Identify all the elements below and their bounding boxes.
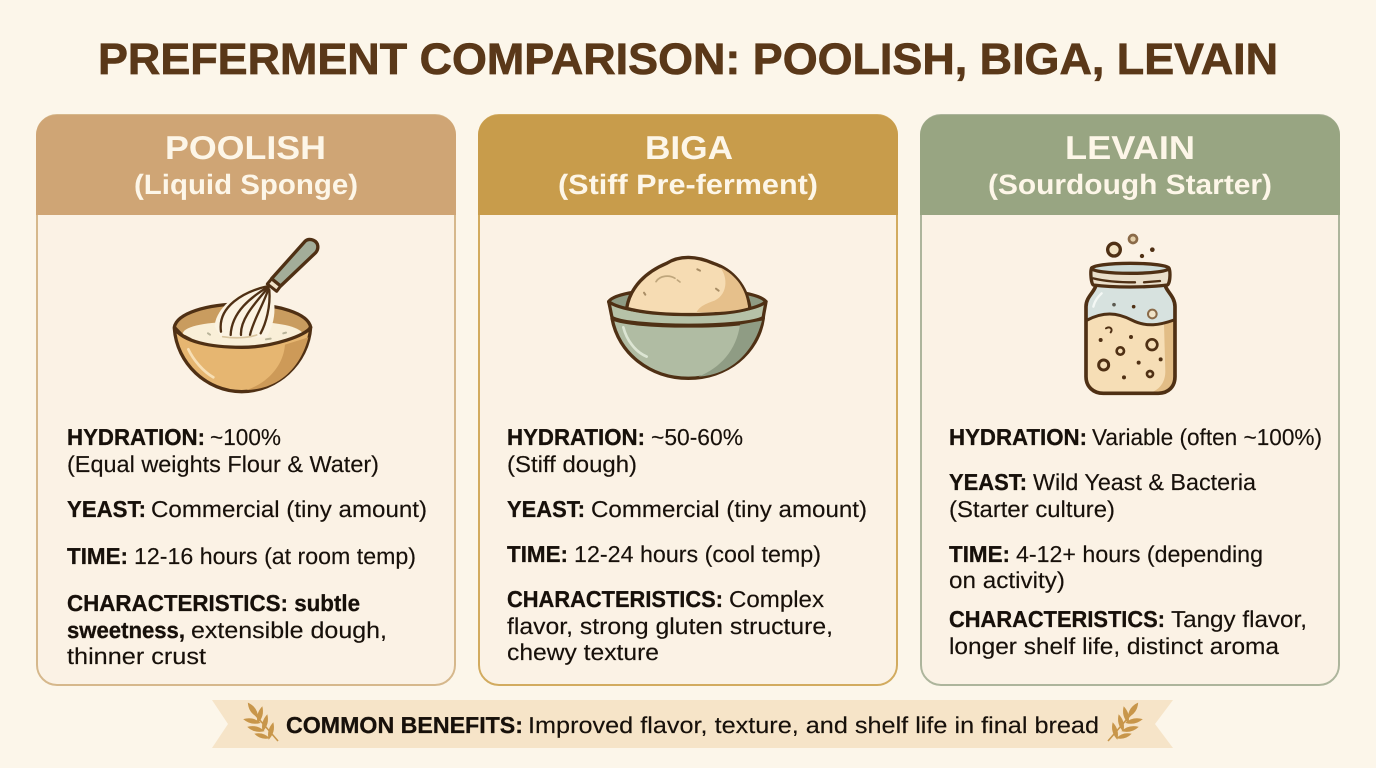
hydration: (Stiff dough)	[507, 451, 637, 477]
time: 12-24 hours (cool temp)	[574, 541, 821, 567]
characteristics: CHARACTERISTICS:	[507, 586, 723, 612]
yeast: Commercial (tiny amount)	[591, 496, 867, 522]
characteristics: extensible dough,	[191, 617, 387, 643]
poolish heading	[134, 129, 358, 200]
panel: biga	[478, 115, 898, 685]
biga facts	[507, 424, 867, 665]
characteristics: longer shelf life, distinct aroma	[949, 633, 1279, 659]
banner text: Improved flavor, texture, and shelf life in final bread	[528, 712, 1099, 738]
biga heading	[558, 129, 818, 200]
biga header band	[478, 115, 898, 215]
banner text: COMMON BENEFITS:	[286, 712, 523, 738]
time: TIME:	[67, 543, 128, 569]
hydration: (Equal weights Flour & Water)	[67, 451, 379, 477]
hydration: HYDRATION:	[949, 424, 1087, 450]
characteristics: chewy texture	[507, 639, 659, 665]
characteristics	[507, 586, 833, 665]
characteristics	[67, 590, 387, 669]
biga heading: (Stiff Pre-ferment)	[558, 169, 818, 200]
time: TIME:	[949, 541, 1010, 567]
levain header band	[920, 115, 1340, 215]
poolish facts	[67, 424, 427, 669]
yeast: YEAST:	[949, 469, 1027, 495]
poolish header band	[36, 115, 456, 215]
hydration	[949, 424, 1322, 450]
hydration: HYDRATION:	[507, 424, 645, 450]
levain facts	[949, 424, 1322, 659]
time: TIME:	[507, 541, 568, 567]
hydration: HYDRATION:	[67, 424, 205, 450]
poolish heading: POOLISH	[165, 129, 326, 166]
characteristics: flavor, strong gluten structure,	[507, 613, 833, 639]
time: 4-12+ hours (depending	[1016, 541, 1263, 567]
yeast	[949, 469, 1256, 522]
hydration	[507, 424, 743, 477]
characteristics: sweetness,	[67, 617, 185, 643]
characteristics: Complex	[729, 586, 825, 612]
ribbon	[212, 700, 1173, 748]
icon: wheat left	[243, 701, 278, 741]
poolish heading: (Liquid Sponge)	[134, 169, 358, 200]
characteristics	[949, 606, 1307, 659]
hydration: Variable (often ~100%)	[1092, 424, 1322, 450]
panel: levain	[920, 115, 1340, 685]
levain heading: (Sourdough Starter)	[988, 169, 1272, 200]
biga heading: BIGA	[645, 129, 733, 166]
time	[949, 541, 1263, 593]
time: 12-16 hours (at room temp)	[134, 543, 416, 569]
icon: bowl with dough	[609, 257, 766, 378]
banner text	[286, 712, 1099, 738]
characteristics: CHARACTERISTICS:	[949, 606, 1165, 632]
hydration	[67, 424, 379, 477]
characteristics: thinner crust	[67, 643, 207, 669]
icon: bowl with whisk	[174, 239, 318, 392]
levain heading: LEVAIN	[1065, 129, 1195, 166]
title: PREFERMENT COMPARISON: POOLISH, BIGA, LEVAIN	[98, 35, 1278, 84]
yeast: Commercial (tiny amount)	[151, 496, 427, 522]
characteristics: CHARACTERISTICS: subtle	[67, 590, 360, 616]
yeast: (Starter culture)	[949, 496, 1115, 522]
icon: wheat right	[1108, 701, 1143, 741]
hydration: ~100%	[210, 424, 281, 450]
banner: common benefits	[212, 700, 1173, 748]
levain heading	[988, 129, 1272, 200]
yeast: YEAST:	[67, 496, 146, 522]
panel: poolish	[36, 115, 456, 685]
characteristics: Tangy flavor,	[1171, 606, 1307, 632]
hydration: ~50-60%	[651, 424, 743, 450]
yeast: Wild Yeast & Bacteria	[1033, 469, 1256, 495]
yeast: YEAST:	[507, 496, 585, 522]
time: on activity)	[949, 567, 1065, 593]
icon: starter jar	[1086, 235, 1175, 393]
